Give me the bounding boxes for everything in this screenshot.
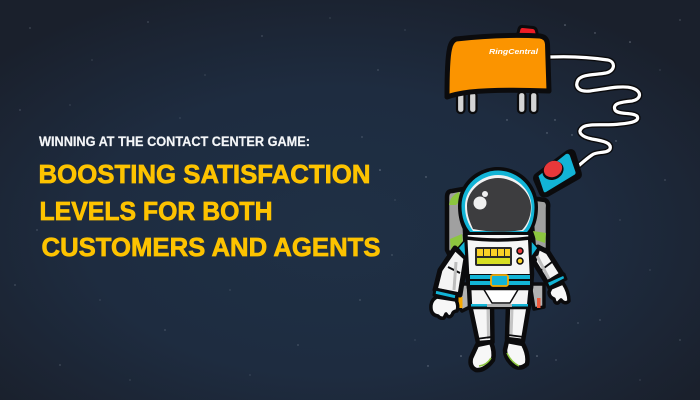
icon: cable	[550, 57, 640, 168]
device red button	[517, 26, 538, 37]
subtitle: WINNING AT THE CONTACT CENTER GAME:	[39, 134, 310, 149]
icon: astronaut	[431, 167, 569, 370]
headline line 2: LEVELS FOR BOTH	[40, 196, 272, 226]
headline line 3: CUSTOMERS AND AGENTS	[42, 232, 380, 262]
icon: RingCentral device	[447, 26, 549, 113]
torso	[465, 235, 532, 288]
left boot	[471, 342, 494, 370]
pelvis details	[471, 288, 528, 307]
helmet	[458, 167, 538, 235]
icon: remote control	[534, 150, 581, 197]
right leg	[507, 305, 529, 341]
shoulder accents	[458, 240, 538, 258]
chest buttons	[517, 248, 523, 264]
heading group	[38, 134, 380, 262]
left glove	[431, 297, 458, 318]
visor highlights	[474, 191, 488, 210]
left cuff	[434, 289, 457, 300]
right arm	[534, 247, 562, 283]
chest display	[475, 247, 512, 266]
left arm	[435, 248, 466, 295]
device orange body	[447, 35, 549, 97]
right cuff	[546, 274, 566, 288]
helmet visor	[467, 178, 531, 232]
right boot	[505, 341, 528, 368]
headline line 1: BOOSTING SATISFACTION	[38, 159, 370, 189]
pelvis	[469, 286, 531, 307]
backpack	[447, 189, 548, 262]
right glove	[549, 283, 569, 303]
belt	[469, 274, 531, 287]
device prongs	[457, 92, 538, 113]
device logo: RingCentral	[489, 47, 539, 56]
boot soles	[479, 353, 519, 366]
left leg	[470, 305, 492, 343]
lower backpack	[457, 284, 544, 311]
helmet collar	[466, 232, 530, 240]
